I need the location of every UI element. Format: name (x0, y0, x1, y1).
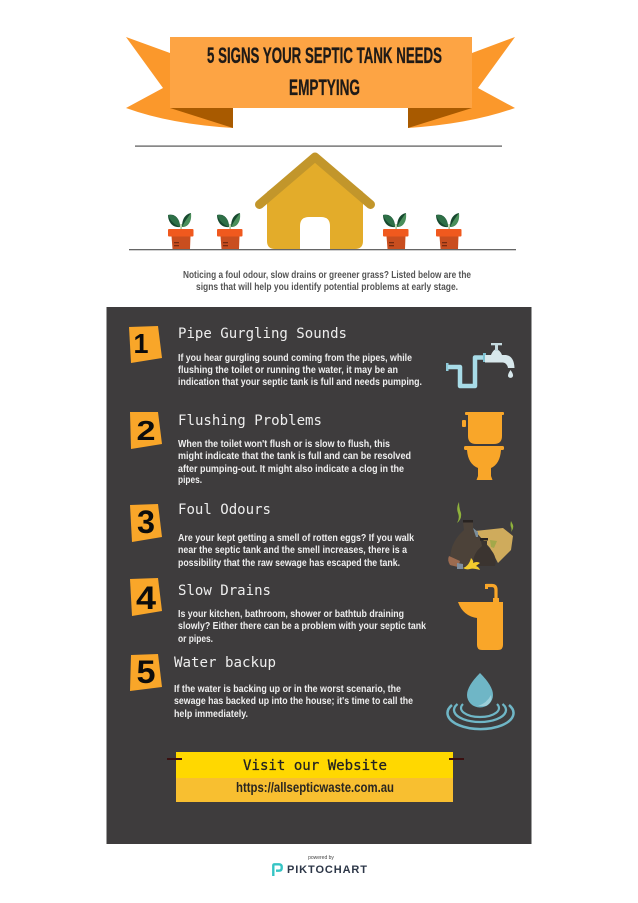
number tag 1 (129, 326, 162, 363)
body text 5: help immediately. (174, 708, 248, 720)
title banner (126, 37, 515, 128)
body text 4: slowly? Either there can be a problem with your septic tank (178, 620, 426, 632)
icon: toilet (462, 412, 504, 480)
number tag 4: 4 (136, 580, 156, 616)
body text 3: Are your kept getting a smell of rotten eggs? If you walk (178, 532, 414, 544)
title: 5 SIGNS YOUR SEPTIC TANK NEEDS (207, 43, 442, 68)
title: EMPTYING (289, 75, 360, 100)
icon: piktochart logo (273, 864, 282, 876)
number tag 2: 2 (136, 415, 156, 446)
icon: plant pot 2 (217, 213, 242, 249)
sign 1 (129, 326, 514, 388)
body text 4: or pipes. (178, 633, 213, 645)
heading 1: Pipe Gurgling Sounds (178, 326, 347, 342)
sign 2 (130, 412, 504, 486)
panel: signs (106, 307, 532, 844)
icon: plant pot 4 (436, 213, 462, 249)
number tag 5: 5 (136, 654, 156, 690)
icon: plant pot 1 (168, 213, 194, 249)
icon: water drop with ripples (448, 673, 514, 729)
number tag 5 (130, 654, 162, 691)
icon: garbage bags and box (448, 502, 513, 570)
body text 4 (178, 608, 426, 645)
body text 2 (178, 438, 411, 486)
icon: plant pot 3 (383, 213, 408, 249)
heading 2: Flushing Problems (178, 413, 322, 429)
plant pots (168, 213, 462, 249)
body text 5: If the water is backing up or in the worst scenario, the (174, 683, 401, 695)
callout heading: Visit our Website (243, 758, 387, 774)
sign 4 (130, 578, 503, 650)
heading 5: Water backup (174, 655, 276, 671)
piktochart footer: PIKTOCHART (287, 864, 367, 876)
number tag 4 (130, 578, 162, 616)
body text 3: possibility that the raw sewage has escaped the tank. (178, 557, 400, 569)
title (207, 43, 442, 100)
callout: website (167, 752, 464, 802)
icon: sink (458, 584, 503, 650)
body text 5: sewage has backed up into the house; it's time to call the (174, 695, 413, 707)
intro text (183, 269, 471, 293)
number tag 1: 1 (134, 328, 148, 359)
house illustration (260, 155, 370, 249)
body text 1 (178, 352, 422, 388)
body text 3 (178, 532, 414, 569)
number tag 3: 3 (137, 504, 155, 540)
number tag 2 (130, 412, 162, 449)
body text 2: might indicate that the tank is full and can be resolved (178, 450, 411, 462)
intro text: signs that will help you identify potential problems at early stage. (196, 281, 458, 293)
body text 1: flushing the toilet or running the water, it may be an (178, 364, 398, 376)
intro text: Noticing a foul odour, slow drains or greener grass? Listed below are the (183, 269, 471, 281)
heading 3: Foul Odours (178, 502, 271, 518)
body text 2: pipes. (178, 474, 202, 486)
body text 2: When the toilet won't flush or is slow to flush, this (178, 438, 390, 450)
body text 2: after pumping-out. It might also indicate a clog in the (178, 463, 404, 475)
body text 3: near the septic tank and the smell increases, there is a (178, 544, 407, 556)
heading 4: Slow Drains (178, 583, 271, 599)
sign 3 (130, 502, 513, 570)
body text 4: Is your kitchen, bathroom, shower or bathtub draining (178, 608, 404, 620)
piktochart footer: powered by (308, 855, 334, 861)
sign 5 (130, 654, 514, 729)
callout url: https://allsepticwaste.com.au (236, 779, 394, 795)
body text 1: indication that your septic tank is full and needs pumping. (178, 376, 422, 388)
body text 1: If you hear gurgling sound coming from the pipes, while (178, 352, 412, 364)
number tag 3 (130, 504, 162, 542)
piktochart footer (273, 855, 367, 876)
body text 5 (174, 683, 413, 720)
icon: faucet and pipe (446, 343, 514, 386)
